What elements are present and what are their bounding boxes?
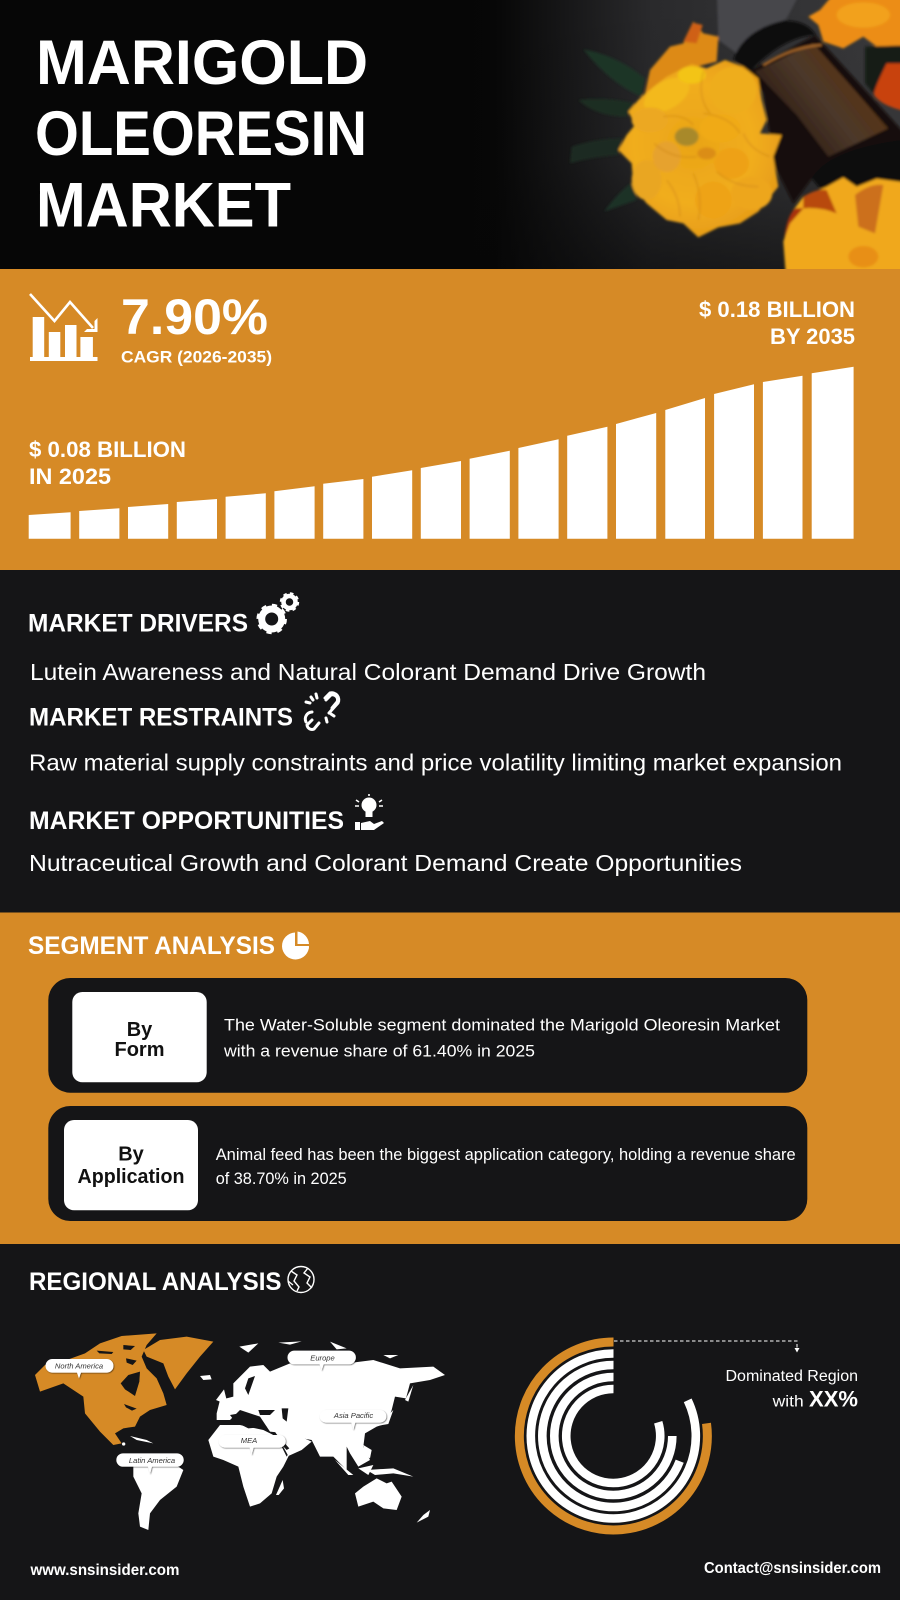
text: restraints: Raw material supply constraints and price volatility limiting market expansion [29, 750, 842, 776]
radial chart [519, 1342, 707, 1530]
footer: website: www.snsinsider.com [30, 1562, 179, 1579]
2035 value [699, 297, 855, 349]
bar chart [29, 367, 854, 539]
card: by application [48, 1106, 807, 1221]
icon: chart with falling arrow [30, 294, 98, 361]
callout labels: Europe [310, 1354, 335, 1362]
other continents [122, 1341, 445, 1530]
callout labels: Latin America [129, 1456, 175, 1465]
icon: broken chain [305, 693, 339, 729]
text: opportunities: Nutraceutical Growth and Colorant Demand Create Opportunities [29, 850, 742, 876]
inland seas [230, 1376, 289, 1450]
heading: market opportunities: MARKET OPPORTUNITIES [29, 807, 344, 835]
icon: gears [258, 594, 298, 632]
icon: globe [288, 1266, 314, 1292]
callouts [45, 1351, 386, 1474]
label: by form [72, 992, 207, 1082]
2035 value: BY 2035 [770, 324, 855, 349]
panel: segment analysis [0, 912, 900, 1244]
world map [35, 1333, 445, 1530]
North America and Greenland [35, 1333, 213, 1445]
header photo: marigold flowers and bottle [526, 0, 900, 269]
panel: market drivers, restraints, opportunities [28, 594, 842, 876]
text: by application: Animal feed has been the biggest application category, holding a revenue share [216, 1145, 796, 1164]
title: OLEORESIN [35, 99, 367, 169]
icon: idea in hand [355, 794, 384, 830]
text: by form: with a revenue share of 61.40% in 2025 [223, 1042, 535, 1060]
callout labels [55, 1354, 373, 1465]
label: by form: Form [114, 1039, 164, 1061]
panel: regional analysis [29, 1266, 858, 1530]
text: by application: of 38.70% in 2025 [216, 1169, 347, 1188]
footer: contact: Contact@snsinsider.com [704, 1560, 881, 1577]
CAGR value: 7.90% [121, 289, 268, 345]
panel: header [0, 0, 900, 287]
2025 value [29, 437, 186, 489]
dashed leader arrow [614, 1341, 800, 1352]
title: MARIGOLD [36, 28, 368, 98]
heading: regional analysis: REGIONAL ANALYSIS [29, 1268, 282, 1296]
dominated region text: with [772, 1394, 804, 1410]
card: by form [48, 978, 807, 1093]
CAGR label: CAGR (2026-2035) [121, 348, 272, 366]
label: by application: By [118, 1144, 145, 1166]
heading: market restraints: MARKET RESTRAINTS [29, 704, 293, 732]
title [35, 28, 368, 240]
label: by application: Application [78, 1166, 184, 1188]
label: by application [64, 1120, 198, 1210]
text: by form [223, 1016, 780, 1060]
dominated region text: Dominated Region [726, 1368, 858, 1385]
text: by application [216, 1145, 796, 1188]
callout labels: North America [55, 1362, 103, 1370]
text: by form: The Water-Soluble segment dominated the Marigold Oleoresin Market [224, 1016, 780, 1034]
title: MARKET [36, 170, 291, 240]
heading: market drivers: MARKET DRIVERS [28, 610, 248, 638]
label: by form: By [127, 1019, 153, 1041]
2025 value: IN 2025 [29, 464, 111, 489]
heading: segment analysis: SEGMENT ANALYSIS [28, 932, 275, 960]
dominated region text: XX% [809, 1386, 858, 1412]
2025 value: $ 0.08 BILLION [29, 437, 186, 462]
callout labels: MEA [241, 1436, 257, 1445]
2035 value: $ 0.18 BILLION [699, 297, 855, 322]
icon: pie chart [282, 932, 309, 959]
dominated region text [726, 1368, 858, 1412]
callout labels: Asia Pacific [333, 1411, 373, 1420]
panel: market size growth [0, 269, 900, 570]
text: drivers: Lutein Awareness and Natural Colorant Demand Drive Growth [30, 659, 706, 685]
